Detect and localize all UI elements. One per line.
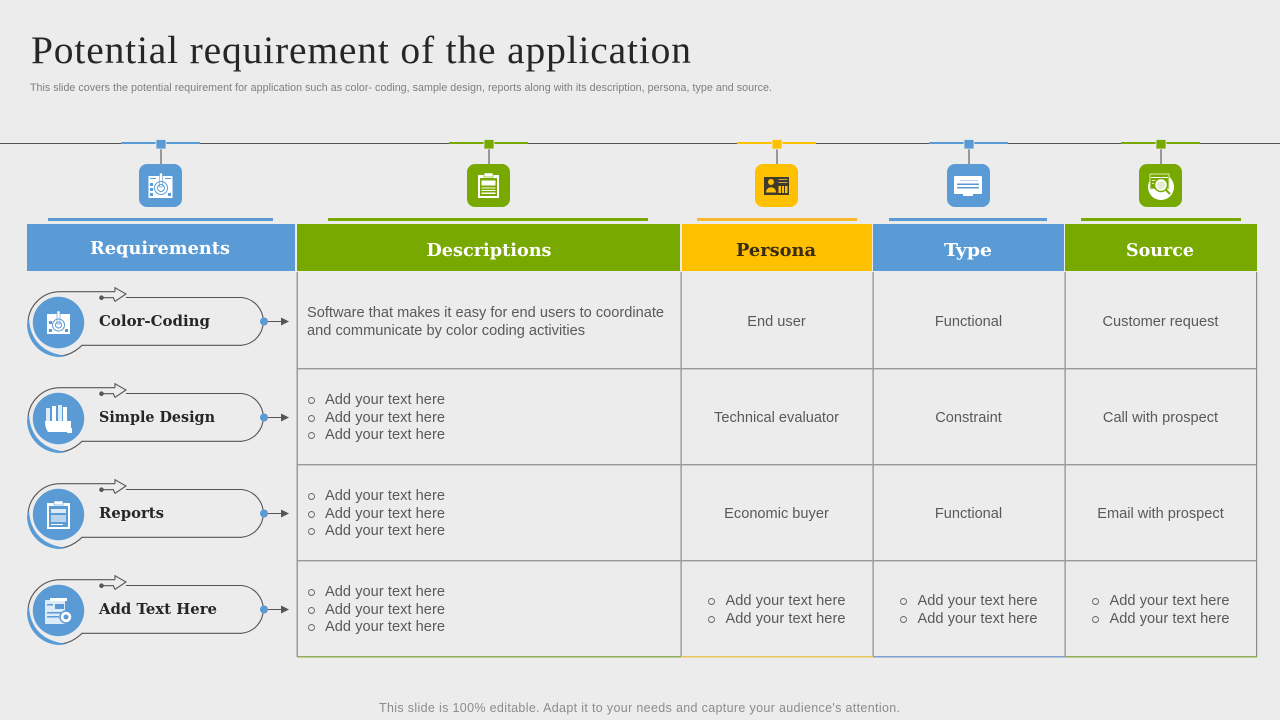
header: requirements xyxy=(27,224,295,271)
row 1 text: and communicate by color coding activities xyxy=(307,323,585,339)
row 4 text: Add your text here xyxy=(918,611,1038,627)
icon: color coding dial xyxy=(148,173,172,198)
header: source: Source xyxy=(1126,240,1194,261)
row 3 text: Economic buyer xyxy=(724,506,829,522)
row 1 text: End user xyxy=(747,314,806,330)
column marker: persona xyxy=(697,140,857,221)
row 4 text: Add your text here xyxy=(325,584,445,600)
requirement pill: reports: Reports xyxy=(99,504,164,522)
icon: color coding dial xyxy=(47,311,70,334)
row 2 text: Call with prospect xyxy=(1103,410,1218,426)
icon: search disc xyxy=(1148,174,1174,200)
row 3 text xyxy=(308,488,1224,539)
row 1 text: Software that makes it easy for end users to coordinate xyxy=(307,305,664,321)
requirement pill: reports xyxy=(27,480,289,549)
row 4 text: Add your text here xyxy=(1110,593,1230,609)
subtitle: This slide covers the potential requirement for application such as color- coding, sample design, reports along with its description, persona, type and source. xyxy=(30,82,772,94)
icon: report clipboard xyxy=(47,501,70,529)
requirement pill: color-coding xyxy=(27,288,289,357)
footer note: This slide is 100% editable. Adapt it to your needs and capture your audience's attention. xyxy=(379,701,900,715)
row 3 text: Functional xyxy=(935,506,1002,522)
row 4 text: Add your text here xyxy=(325,602,445,618)
row 4 text xyxy=(308,584,1230,635)
requirement pill: simple design: Simple Design xyxy=(99,408,215,426)
header: persona: Persona xyxy=(736,240,816,261)
header: source xyxy=(1065,224,1257,271)
header: persona xyxy=(682,224,872,271)
requirement pill: color-coding: Color-Coding xyxy=(99,312,210,330)
requirement pill: add text here xyxy=(27,576,289,645)
row 1 text xyxy=(307,305,1218,339)
requirement pill: add text here: Add Text Here xyxy=(98,600,217,618)
icon: document with gear xyxy=(45,598,72,624)
row 4 text: Add your text here xyxy=(918,593,1038,609)
header: descriptions: Descriptions xyxy=(426,240,552,261)
icon: hand with pencils xyxy=(45,405,72,433)
requirement pill: simple design xyxy=(27,384,289,453)
table xyxy=(296,272,1257,658)
row 2 text: Add your text here xyxy=(325,392,445,408)
row 1 text: Customer request xyxy=(1102,314,1218,330)
row 2 text: Add your text here xyxy=(325,427,445,443)
column marker: source xyxy=(1081,140,1241,221)
row 2 text: Technical evaluator xyxy=(714,410,839,426)
row 4 text: Add your text here xyxy=(325,619,445,635)
row 3 text: Add your text here xyxy=(325,488,445,504)
column marker: requirements xyxy=(48,140,273,221)
row 2 text: Constraint xyxy=(935,410,1002,426)
header: type: Type xyxy=(944,240,992,261)
row 3 text: Add your text here xyxy=(325,523,445,539)
icon: clipboard xyxy=(478,173,499,198)
row 4 text: Add your text here xyxy=(726,611,846,627)
column marker: descriptions xyxy=(328,140,648,221)
row 1 text: Functional xyxy=(935,314,1002,330)
row 4 text: Add your text here xyxy=(726,593,846,609)
row 2 text: Add your text here xyxy=(325,410,445,426)
row 3 text: Email with prospect xyxy=(1097,506,1224,522)
header: type xyxy=(873,224,1064,271)
title: Potential requirement of the application xyxy=(31,28,691,72)
row 2 text xyxy=(308,392,1218,443)
header: descriptions xyxy=(297,224,680,271)
header: requirements: Requirements xyxy=(90,238,230,259)
row 4 text: Add your text here xyxy=(1110,611,1230,627)
row 3 text: Add your text here xyxy=(325,506,445,522)
column marker: type xyxy=(889,140,1047,221)
icon: id card xyxy=(764,177,789,195)
icon: monitor xyxy=(954,176,982,196)
